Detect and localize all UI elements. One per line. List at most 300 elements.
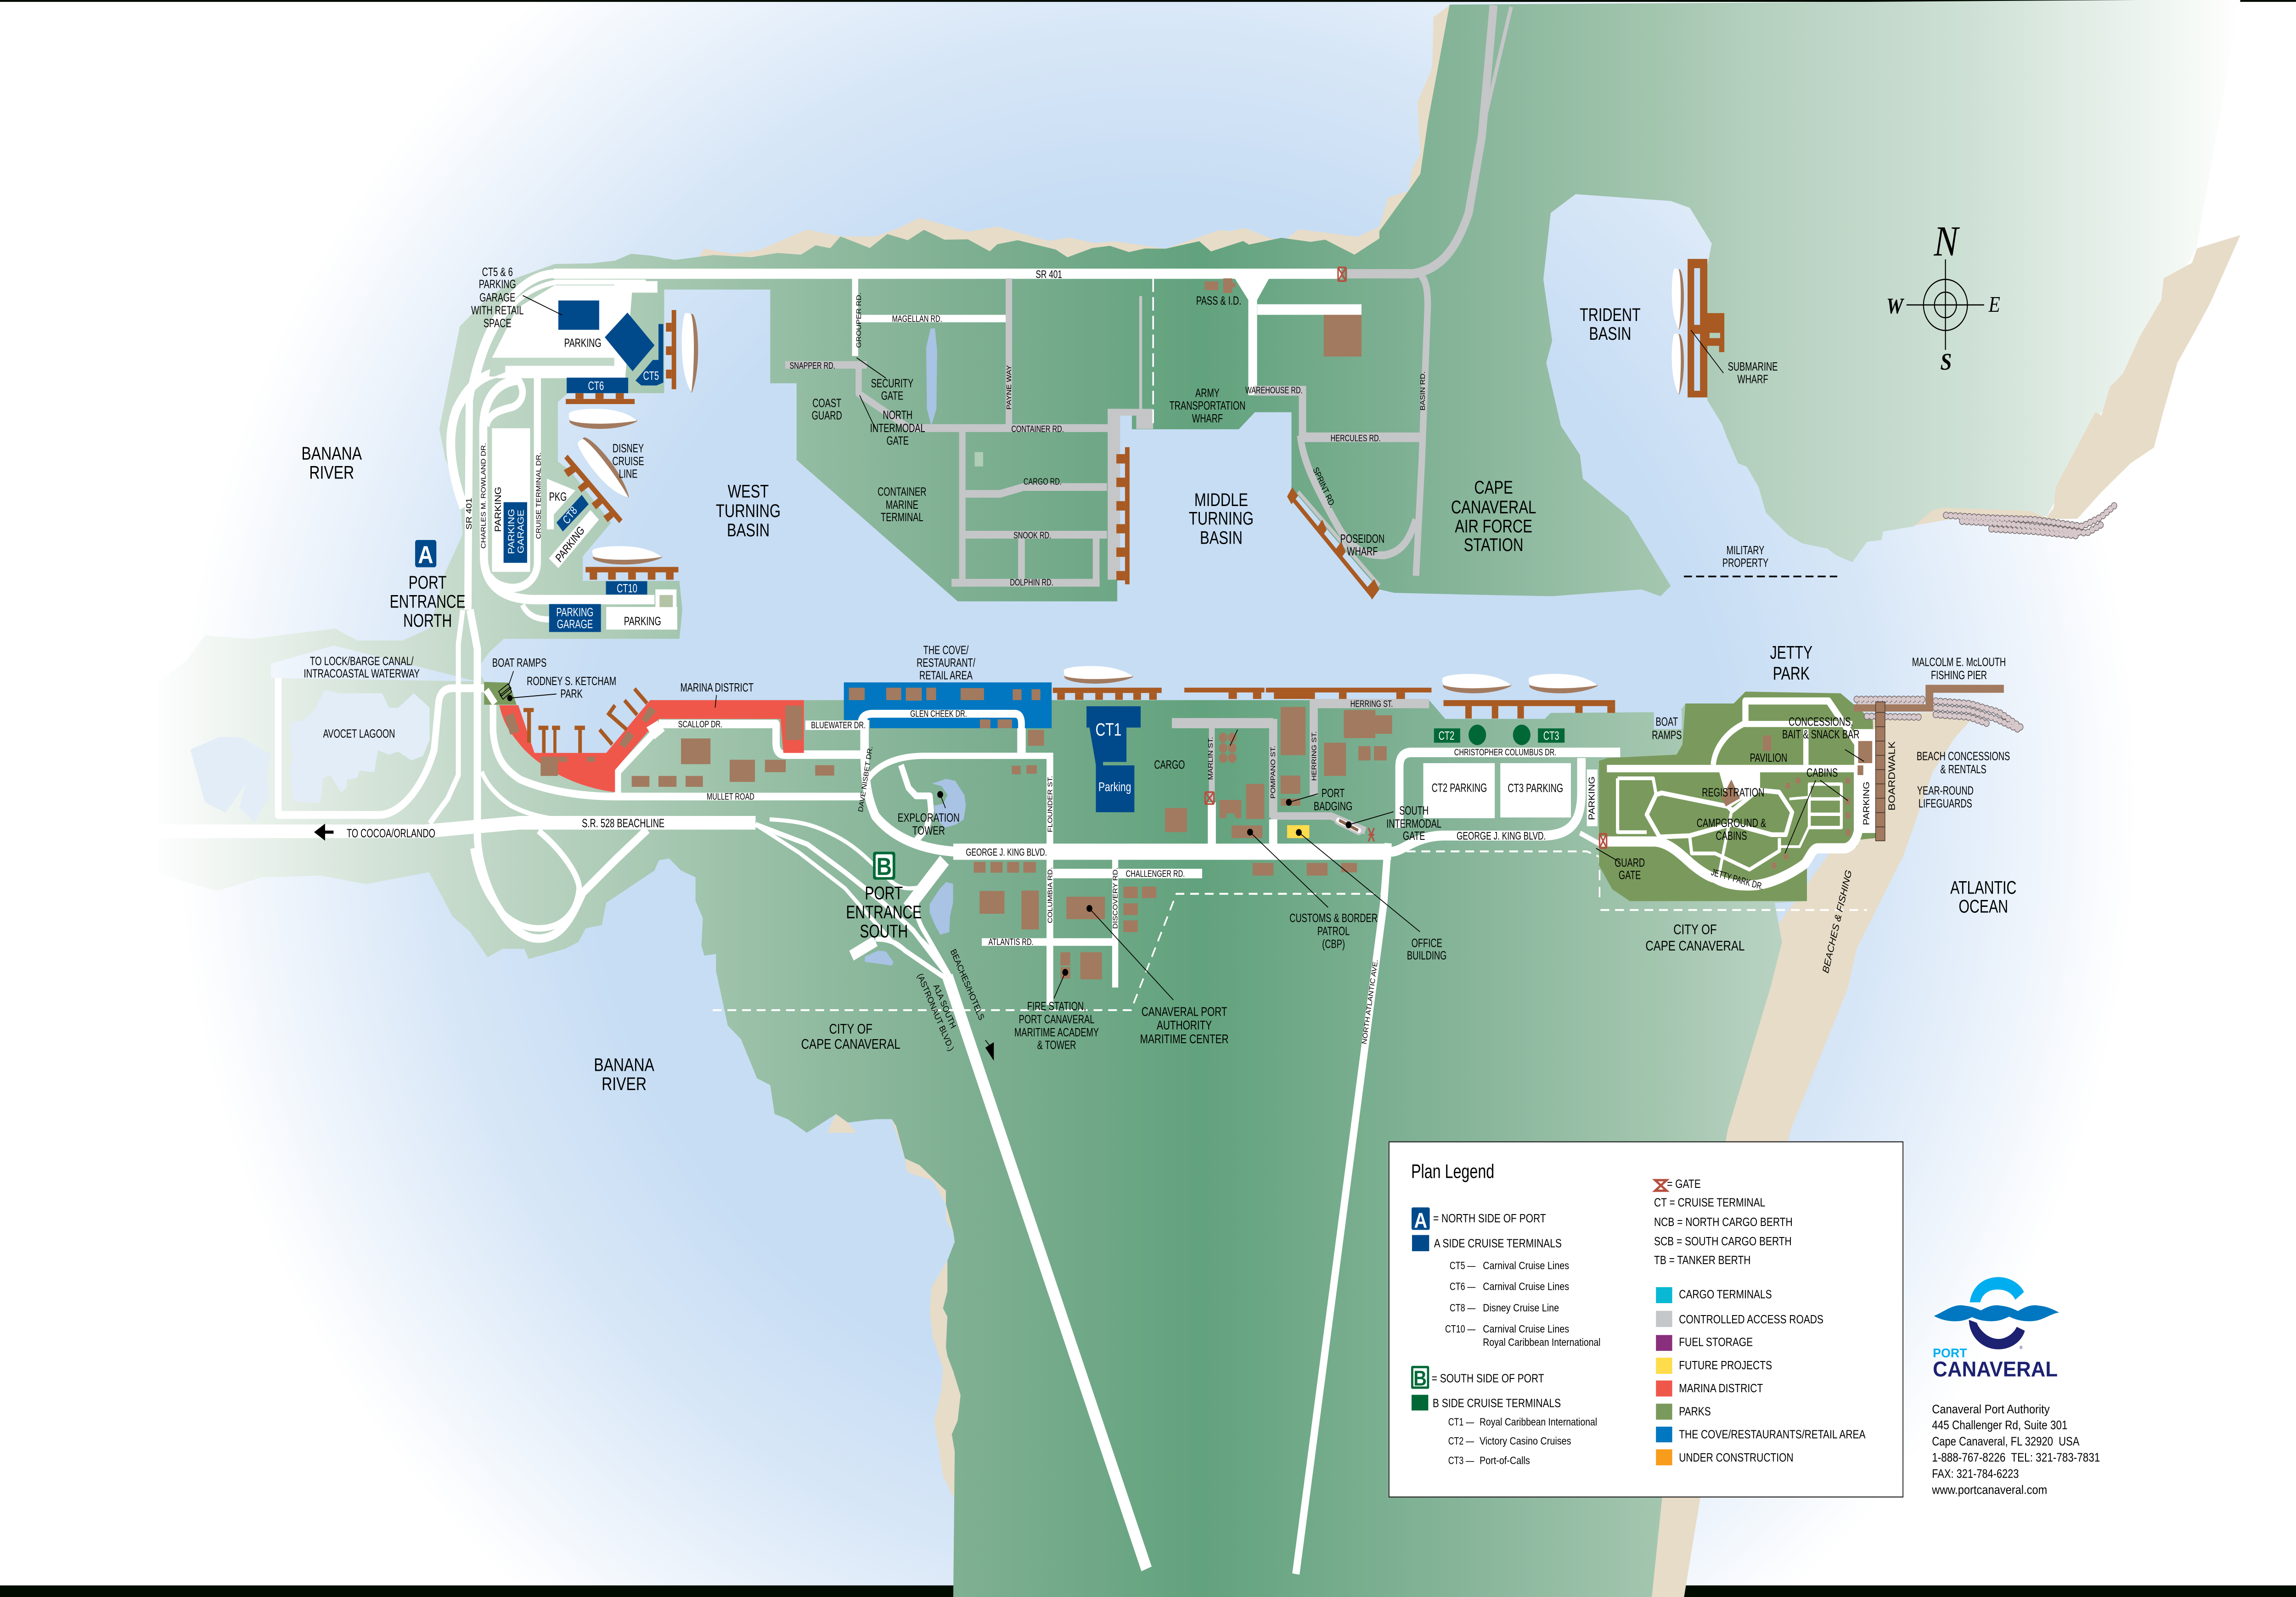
label: West Turning Basin: BASIN	[727, 520, 770, 540]
legend: abbreviations	[1654, 1197, 1793, 1267]
pier CT8	[564, 456, 621, 522]
label: Atlantic Ocean: OCEAN	[1958, 896, 2008, 917]
label: Rodney S. Ketcham Park: PARK	[560, 687, 583, 700]
road label: Basin: BASIN RD.	[1419, 371, 1427, 410]
label: Port Badging: PORT	[1322, 787, 1345, 800]
legend: abbreviations: TB = TANKER BERTH	[1654, 1254, 1750, 1267]
label: Boat Ramps east: RAMPS	[1652, 728, 1682, 742]
label: Coast Guard	[812, 397, 842, 422]
McLouth fishing pier	[1854, 685, 2004, 712]
label: Guard Gate: GUARD	[1615, 856, 1645, 869]
compass rose: N	[1933, 218, 1960, 265]
label: CT3 parking: CT3 PARKING	[1508, 782, 1563, 795]
rock jetty at McLouth pier	[1857, 699, 2022, 729]
terminal CT5	[636, 324, 664, 386]
label: City of Cape Canaveral south-east	[1645, 922, 1745, 954]
pier CT5	[666, 310, 676, 389]
label: Campground and Cabins	[1697, 816, 1766, 843]
label: Boat Ramps east: BOAT	[1656, 715, 1678, 728]
label: Fire Station	[1014, 1000, 1099, 1052]
label: Poseidon Wharf	[1340, 532, 1384, 558]
label: Concessions: BAIT & SNACK BAR	[1782, 728, 1859, 741]
legend: colour key: FUTURE PROJECTS	[1679, 1359, 1772, 1372]
terminal CT8	[557, 495, 589, 531]
label: boat ramps west: BOAT RAMPS	[492, 656, 546, 669]
road label: Mullet: MULLET ROAD	[707, 791, 754, 802]
road label: SR 401 top: SR 401	[1035, 269, 1062, 281]
label: Trident Basin	[1580, 304, 1641, 344]
label: Jetty Park: PARK	[1773, 663, 1810, 684]
legend: A side terminal list: Carnival Cruise Lines	[1483, 1323, 1569, 1335]
label: Campground and Cabins: CABINS	[1716, 829, 1747, 843]
road label: Snapper: SNAPPER RD.	[790, 360, 835, 371]
label: City of Cape Canaveral south-west	[801, 1021, 900, 1052]
label: Banana River north	[301, 443, 362, 483]
label: North Intermodal Gate: NORTH	[883, 409, 912, 422]
legend: north side: = NORTH SIDE OF PORT	[1433, 1212, 1546, 1225]
label: Customs and Border Patrol: PATROL	[1317, 925, 1350, 938]
road label: Glen Cheek: GLEN CHEEK DR.	[910, 709, 967, 719]
panel: Jetty Park	[1599, 692, 1876, 901]
legend: south side: = SOUTH SIDE OF PORT	[1432, 1372, 1544, 1385]
legend: B side terminal list: Royal Caribbean International	[1480, 1416, 1597, 1428]
legend: A side terminal list: Disney Cruise Line	[1483, 1302, 1559, 1314]
leader lines and dots	[507, 296, 1864, 1000]
label: Port Entrance South: SOUTH	[860, 921, 908, 942]
label: West Turning Basin	[716, 481, 781, 540]
badge A: port entrance north: A	[418, 541, 433, 568]
B side piers and ships	[1053, 666, 1615, 719]
Trident submarine wharf	[1688, 259, 1724, 398]
legend: south side	[1411, 1366, 1544, 1390]
label: Parking garage rowland: GARAGE	[516, 510, 526, 553]
label: Military Property: MILITARY	[1727, 544, 1764, 557]
junction fill at South SR 401	[1234, 278, 1270, 300]
road label: George J King east: GEORGE J. KING BLVD.	[1457, 830, 1546, 842]
label: Disney Cruise Line	[612, 442, 644, 480]
label: Army Transportation Wharf	[1170, 386, 1245, 425]
CT2 and CT3 parking lots	[1423, 763, 1598, 826]
label: City of Cape Canaveral south-east: CITY OF	[1673, 922, 1717, 937]
parking garage rowland	[504, 502, 527, 563]
label: Middle Turning Basin: BASIN	[1200, 528, 1243, 548]
water: lock and barge canal channel	[271, 646, 476, 681]
road label: Herring horizontal: HERRING ST.	[1351, 698, 1393, 709]
legend: north side: A	[1414, 1209, 1427, 1232]
label: Campground and Cabins: CAMPGROUND &	[1697, 816, 1766, 830]
legend title: Plan Legend	[1411, 1161, 1494, 1183]
label: CT6: CT6	[588, 379, 604, 393]
label: CT10: CT10	[617, 582, 637, 595]
label: Security Gate: SECURITY	[871, 377, 913, 390]
legend: A side terminal list: CT6 —	[1450, 1281, 1476, 1293]
road label: A1A South: A1A SOUTH	[932, 982, 958, 1030]
road label: Challenger: CHALLENGER RD.	[1126, 868, 1185, 879]
label: Fire Station: FIRE STATION,	[1027, 1000, 1086, 1013]
north-east beach	[1915, 235, 2240, 525]
label: Beach Concessions: BEACH CONCESSIONS	[1917, 750, 2010, 763]
small square	[659, 595, 673, 607]
legend: B side terminals: B SIDE CRUISE TERMINALS	[1433, 1397, 1561, 1410]
label: The Cove: RESTAURANT/	[917, 656, 975, 669]
label: Middle Turning Basin: TURNING	[1189, 508, 1254, 529]
label: Concessions	[1782, 715, 1859, 741]
pale parking divider	[489, 358, 614, 377]
parking garage CT10	[549, 604, 601, 632]
legend: A side terminal list: CT10 —	[1445, 1323, 1476, 1335]
ship at CT5	[682, 313, 698, 392]
address block: 445 Challenger Rd, Suite 301	[1932, 1419, 2067, 1432]
label: Exploration Tower	[898, 811, 960, 837]
label: Banana River north: BANANA	[301, 443, 362, 464]
label: CT5 and 6 parking garage: PARKING	[479, 278, 516, 291]
label: Security Gate: GATE	[881, 389, 903, 402]
military property dashed boundary	[1684, 576, 1837, 577]
legend: abbreviations: SCB = SOUTH CARGO BERTH	[1654, 1235, 1792, 1248]
label: Banana River south	[594, 1054, 655, 1094]
water: Avocet Lagoon	[191, 690, 430, 822]
label: to lock barge canal: TO LOCK/BARGE CANAL/	[310, 655, 414, 668]
address block: 1-888-767-8226 TEL: 321-783-7831	[1932, 1451, 2100, 1465]
south intermodal gate island	[1339, 820, 1359, 831]
label: Parking garage rowland: PARKING	[506, 509, 517, 554]
label: CT2 tag: CT2	[1439, 729, 1454, 742]
label: Military Property	[1722, 544, 1768, 569]
map labels: road names condensed	[678, 269, 1764, 1053]
label: McLouth Fishing Pier	[1912, 655, 2006, 682]
label: Security Gate	[871, 377, 913, 402]
label: CT1: CT1	[1095, 720, 1121, 740]
legend: colour key: FUEL STORAGE	[1679, 1336, 1753, 1349]
label: Container Marine Terminal: TERMINAL	[881, 511, 923, 524]
label: CT8: CT8	[560, 504, 580, 527]
label: Avocet Lagoon: AVOCET LAGOON	[323, 727, 395, 740]
boardwalk	[1876, 702, 1885, 841]
road label: Warehouse: WAREHOUSE RD.	[1245, 385, 1303, 395]
road label: Marlin: MARLIN ST.	[1207, 737, 1215, 780]
label: Rodney S. Ketcham Park	[527, 675, 616, 700]
label: Year-round lifeguards	[1917, 784, 1974, 810]
label: Parking garage rowland	[506, 509, 526, 554]
label: Jetty Park: JETTY	[1770, 642, 1812, 663]
road label: Sprint: SPRINT RD.	[1311, 465, 1337, 509]
legend: gate key: = GATE	[1667, 1178, 1701, 1191]
white stubs: Marlin and Pompano lower	[1212, 802, 1273, 845]
panel: plan legend	[1389, 1142, 1903, 1497]
compass rose	[1886, 218, 2000, 375]
legend: abbreviations: CT = CRUISE TERMINAL	[1654, 1197, 1765, 1209]
road label: Atlantis: ATLANTIS RD.	[988, 937, 1034, 947]
road label: Beaches Hotels: BEACHES/HOTELS	[949, 947, 986, 1022]
legend: A side terminal list	[1445, 1260, 1600, 1348]
label: West Turning Basin: WEST	[728, 481, 769, 501]
label: Submarine Wharf: SUBMARINE	[1728, 360, 1778, 373]
label: Army Transportation Wharf: WHARF	[1192, 412, 1223, 425]
A-side terminals: parking white blocks	[492, 281, 677, 630]
label: parking north lot: PARKING	[564, 336, 602, 349]
label: Beaches and Fishing: BEACHES & FISHING	[1820, 869, 1854, 974]
panel: marina district	[499, 700, 804, 792]
label: CT5 and 6 parking garage: CT5 & 6	[482, 265, 513, 279]
ship at CT10	[592, 546, 662, 564]
park: Rodney S. Ketcham Park	[484, 682, 517, 705]
label: Port Entrance North	[390, 573, 465, 631]
future project: yellow office building	[1287, 825, 1309, 838]
Poseidon wharf	[1287, 487, 1379, 600]
label: Port Entrance South: PORT	[865, 883, 903, 903]
logo: Port Canaveral: ®	[2020, 1345, 2022, 1350]
label: Fire Station: MARITIME ACADEMY	[1014, 1026, 1099, 1039]
road label: Dave Nisbet: DAVE NISBET DR.	[857, 746, 874, 813]
label: Office Building	[1407, 937, 1446, 962]
legend: B side terminal list: Victory Casino Cruises	[1480, 1435, 1571, 1447]
legend: A side terminal list: Carnival Cruise Lines	[1483, 1281, 1569, 1293]
arrow: to Cocoa Orlando	[314, 824, 333, 841]
label: Canaveral Port Authority: MARITIME CENTER	[1140, 1032, 1229, 1046]
label: Port Entrance South	[846, 883, 922, 942]
legend: abbreviations: NCB = NORTH CARGO BERTH	[1654, 1216, 1793, 1229]
label: The Cove	[917, 643, 975, 682]
label: CT5: CT5	[643, 369, 659, 382]
label: Trident Basin: TRIDENT	[1580, 304, 1641, 325]
legend: colour key	[1656, 1287, 1866, 1465]
label: Marina District: MARINA DISTRICT	[680, 681, 754, 694]
label: Poseidon Wharf: POSEIDON	[1340, 532, 1384, 545]
label: Fire Station: PORT CANAVERAL	[1019, 1012, 1094, 1026]
label: Port Entrance North: NORTH	[403, 611, 452, 631]
label: Office Building: OFFICE	[1412, 937, 1442, 950]
legend: A side terminals: A SIDE CRUISE TERMINALS	[1434, 1237, 1562, 1250]
submarines	[1672, 269, 1684, 394]
label: Middle Turning Basin	[1189, 489, 1254, 548]
pier CT6	[566, 393, 635, 404]
legend: colour key: THE COVE/RESTAURANTS/RETAIL AREA	[1679, 1428, 1866, 1441]
legend: colour key: UNDER CONSTRUCTION	[1679, 1451, 1794, 1465]
legend: north side	[1412, 1208, 1546, 1232]
label: CT2 parking: CT2 PARKING	[1432, 782, 1487, 794]
arrow: beaches hotels	[985, 1040, 994, 1061]
terminal CT10	[606, 581, 647, 595]
logo: Port Canaveral: PORT	[1933, 1346, 1967, 1360]
label: CT3 tag: CT3	[1543, 729, 1559, 742]
label: McLouth Fishing Pier: MALCOLM E. McLOUTH	[1912, 655, 2006, 669]
roads: public white roads	[88, 274, 1620, 1574]
map labels: vertical road names	[464, 292, 1897, 1045]
label: South Intermodal Gate: INTERMODAL	[1386, 817, 1441, 830]
label: Guard Gate: GATE	[1619, 868, 1641, 882]
road label: George J King west: GEORGE J. KING BLVD.	[966, 847, 1047, 858]
pale yard rectangle	[974, 452, 983, 467]
label: parking CT10: PARKING	[624, 614, 661, 628]
badge B: port entrance south	[873, 852, 895, 880]
compass rose: W	[1886, 294, 1904, 318]
road label: Bluewater: BLUEWATER DR.	[811, 720, 866, 731]
label: CT5 and 6 parking garage	[471, 265, 523, 330]
label: Cape Canaveral Air Force Station: AIR FORCE	[1455, 516, 1532, 536]
road label: Jetty Park Dr: JETTY PARK DR.	[1710, 866, 1764, 892]
address block: Cape Canaveral, FL 32920 USA	[1932, 1435, 2080, 1448]
label: Submarine Wharf	[1728, 360, 1778, 386]
road label: Dolphin: DOLPHIN RD.	[1010, 577, 1053, 588]
legend: A side terminal list: Royal Caribbean International	[1483, 1336, 1600, 1348]
label: SR 528 Beachline: S.R. 528 BEACHLINE	[582, 816, 664, 830]
north-east rock jetty	[1946, 504, 2116, 536]
label: to lock barge canal	[304, 655, 420, 680]
terminal tags CT2 CT3	[1434, 725, 1564, 745]
legend: B side terminal list: CT3 —	[1448, 1455, 1474, 1467]
label: Disney Cruise Line: DISNEY	[613, 442, 644, 455]
beach sand	[688, 5, 1975, 1597]
legend: B side terminal list: CT2 —	[1448, 1435, 1474, 1447]
gates	[1205, 267, 1607, 848]
label: City of Cape Canaveral south-east: CAPE CANAVERAL	[1645, 938, 1745, 954]
label: Boardwalk: BOARDWALK	[1886, 741, 1897, 810]
legend: A side terminal list: Carnival Cruise Lines	[1483, 1260, 1569, 1271]
road label: Charles Rowland: CHARLES M. ROWLAND DR.	[480, 443, 487, 549]
label: The Cove: THE COVE/	[923, 643, 969, 657]
ship at Disney CT8	[575, 432, 634, 505]
road label: Magellan: MAGELLAN RD.	[892, 314, 942, 324]
label: Port Entrance North: ENTRANCE	[390, 591, 465, 612]
label: parking garage CT10: PARKING	[556, 606, 593, 619]
label: parking garage CT10: GARAGE	[557, 618, 593, 631]
label: CT5 and 6 parking garage: WITH RETAIL	[471, 304, 523, 317]
label: Jetty Park	[1770, 642, 1812, 684]
label: PKG: PKG	[549, 490, 567, 503]
label: Boat Ramps east	[1652, 715, 1682, 742]
road label: Flounder: FLOUNDER ST.	[1047, 776, 1054, 832]
road label: Cargo: CARGO RD.	[1024, 476, 1062, 487]
badge B: port entrance south: B	[877, 853, 892, 880]
road label: Scallop: SCALLOP DR.	[678, 719, 722, 730]
label: Middle Turning Basin: MIDDLE	[1194, 489, 1248, 510]
label: The Cove: RETAIL AREA	[919, 669, 973, 682]
legend: A side terminal list: CT5 —	[1450, 1260, 1476, 1271]
road label: Container: CONTAINER RD.	[1011, 423, 1064, 434]
label: Port Badging: BADGING	[1314, 799, 1352, 813]
address block: FAX: 321-784-6223	[1932, 1467, 2019, 1481]
label: North Intermodal Gate: GATE	[886, 434, 909, 447]
label: North Intermodal Gate	[870, 409, 925, 447]
label: Concessions: CONCESSIONS,	[1789, 715, 1853, 728]
label: Poseidon Wharf: WHARF	[1347, 545, 1378, 558]
road label: North Atlantic: NORTH ATLANTIC AVE.	[1361, 959, 1379, 1045]
address block: Canaveral Port Authority	[1932, 1403, 2050, 1416]
road label: Discovery: DISCOVERY RD.	[1112, 867, 1119, 929]
label: Disney Cruise Line: LINE	[619, 467, 637, 480]
label: Beach Concessions	[1917, 750, 2010, 776]
logo: Port Canaveral	[1933, 1277, 2059, 1381]
label: Army Transportation Wharf: TRANSPORTATION	[1170, 399, 1245, 412]
white strip on park road	[486, 690, 495, 703]
label: Port Entrance North: PORT	[409, 573, 446, 593]
label: City of Cape Canaveral south-west: CITY OF	[829, 1021, 872, 1037]
label: Parking rowland: PARKING	[494, 487, 503, 532]
label: Parking CT3: PARKING	[1587, 776, 1597, 820]
label: West Turning Basin: TURNING	[716, 500, 781, 521]
road label: Astronaut Blvd: (ASTRONAUT BLVD.)	[916, 972, 956, 1053]
label: Customs and Border Patrol: CUSTOMS & BORDER	[1289, 911, 1378, 925]
label: CT1 parking: Parking	[1098, 781, 1131, 794]
label: Container Marine Terminal: MARINE	[886, 498, 918, 512]
label: Pass and ID: PASS & I.D.	[1196, 294, 1241, 307]
legend: B side terminal list	[1448, 1416, 1597, 1467]
label: Year-round lifeguards: LIFEGUARDS	[1919, 797, 1972, 810]
panel: terminal 1	[1086, 706, 1141, 812]
compass rose: E	[1988, 292, 2000, 317]
label: Pavilion: PAVILION	[1750, 751, 1787, 765]
label: Exploration Tower: EXPLORATION	[898, 811, 960, 824]
label: Cape Canaveral Air Force Station	[1451, 477, 1536, 555]
buildings	[632, 278, 1392, 979]
label: to Cocoa Orlando: TO COCOA/ORLANDO	[347, 827, 435, 840]
label: Container Marine Terminal: CONTAINER	[878, 485, 926, 498]
label: Banana River south: BANANA	[594, 1054, 655, 1075]
address block: www.portcanaveral.com	[1931, 1483, 2047, 1497]
boundary dashes	[713, 278, 1867, 1010]
legend: A side terminal list: CT8 —	[1450, 1302, 1476, 1314]
roads: controlled access grey roads	[785, 5, 1511, 831]
label: to lock barge canal: INTRACOASTAL WATERWAY	[304, 667, 420, 680]
road label: Snook: SNOOK RD.	[1013, 530, 1051, 540]
label: South Intermodal Gate: SOUTH	[1399, 804, 1429, 817]
label: Canaveral Port Authority	[1140, 1005, 1229, 1046]
road label: Christopher Columbus: CHRISTOPHER COLUMBUS DR.	[1454, 747, 1556, 758]
label: Cabins: CABINS	[1806, 766, 1838, 779]
label: Year-round lifeguards: YEAR-ROUND	[1917, 784, 1974, 797]
terminal CT6	[567, 377, 628, 393]
label: Cargo: CARGO	[1154, 758, 1185, 771]
label: Atlantic Ocean: ATLANTIC	[1950, 877, 2016, 898]
ship at CT6	[569, 409, 637, 429]
label: Military Property: PROPERTY	[1722, 557, 1768, 569]
label: Fire Station: & TOWER	[1037, 1038, 1076, 1052]
label: CT5 and 6 parking garage: GARAGE	[479, 291, 515, 304]
marina piers	[523, 689, 647, 753]
label: South Intermodal Gate	[1386, 804, 1441, 843]
icon: boat ramps	[499, 684, 512, 699]
road label: Payne Way: PAYNE WAY	[1006, 365, 1013, 410]
bluewater road box	[805, 720, 868, 730]
compass rose: S	[1940, 349, 1952, 375]
label: Port Badging	[1314, 787, 1352, 813]
legend: colour key: PARKS	[1679, 1406, 1711, 1418]
road label: Cruise Terminal: CRUISE TERMINAL DR.	[535, 452, 542, 539]
road over parking	[505, 370, 625, 373]
pier CT10	[585, 567, 678, 579]
water: notch at east boat ramps	[1654, 710, 1682, 729]
CT5 and CT6 parking garage	[558, 300, 599, 330]
label: McLouth Fishing Pier: FISHING PIER	[1931, 669, 1987, 682]
road label: Columbia: COLUMBIA RD.	[1047, 867, 1054, 923]
road label: Grouper: GROUPER RD.	[855, 292, 863, 348]
label: Banana River south: RIVER	[602, 1073, 647, 1094]
legend: colour key: CONTROLLED ACCESS ROADS	[1679, 1313, 1823, 1326]
label: Cape Canaveral Air Force Station: CAPE	[1474, 477, 1513, 498]
legend: A side terminals	[1412, 1235, 1562, 1251]
label: North Intermodal Gate: INTERMODAL	[870, 422, 925, 435]
road label: Herring vertical: HERRING ST.	[1311, 731, 1318, 781]
label: City of Cape Canaveral south-west: CAPE CANAVERAL	[801, 1036, 900, 1052]
map labels: medium place names	[304, 265, 2010, 1052]
legend: B side terminal list: CT1 —	[1448, 1416, 1474, 1428]
terminal diamond CT5	[605, 313, 654, 371]
label: Guard Gate	[1615, 856, 1645, 882]
label: Coast Guard: GUARD	[812, 409, 842, 422]
label: parking garage CT10	[556, 606, 593, 631]
label: Submarine Wharf: WHARF	[1737, 373, 1768, 386]
label: Canaveral Port Authority: CANAVERAL PORT	[1142, 1005, 1227, 1019]
